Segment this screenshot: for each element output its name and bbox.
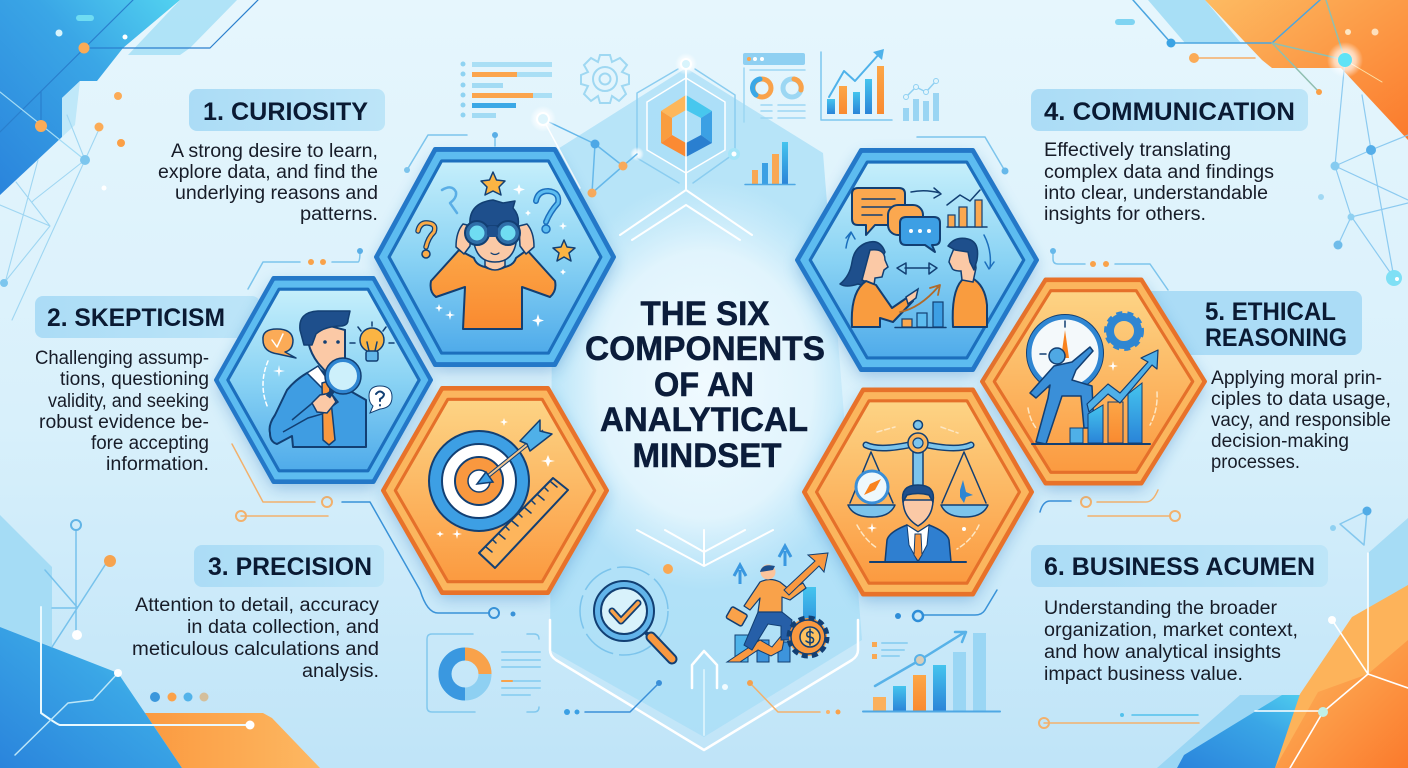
- description: skepticism: robust evidence be-: [39, 412, 209, 433]
- description: business acumen: Understanding the broader: [1044, 598, 1278, 619]
- title: [585, 295, 825, 475]
- heading: curiosity: 1. CURIOSITY: [203, 98, 368, 126]
- hexagon 2 skepticism: [216, 278, 431, 488]
- description: curiosity: underlying reasons and: [175, 183, 378, 204]
- description: business acumen: and how analytical insights: [1044, 642, 1281, 663]
- description: communication: complex data and findings: [1044, 162, 1274, 183]
- icon: magnifier with check: [580, 564, 673, 659]
- heading: curiosity: [189, 89, 385, 131]
- description: ethical reasoning: Applying moral prin-: [1211, 368, 1382, 389]
- bottom right bar chart: [863, 632, 1000, 712]
- hexagon 1 curiosity: [376, 149, 614, 371]
- title: MINDSET: [632, 437, 782, 475]
- description: ethical reasoning: ciples to data usage,: [1211, 389, 1391, 410]
- description: business acumen: organization, market context,: [1044, 620, 1298, 641]
- icon: two people discussing data: [840, 188, 994, 328]
- description: skepticism: information.: [106, 454, 209, 475]
- icon: central hexagon emblem: [630, 53, 740, 183]
- text: 5 ethical reasoning: [1205, 298, 1391, 473]
- corner: bottom right: [1157, 506, 1408, 768]
- description: skepticism: fore accepting: [91, 433, 209, 454]
- heading: precision: 3. PRECISION: [208, 553, 372, 581]
- decorative top bars list: [460, 62, 552, 118]
- title: THE SIX: [640, 295, 770, 333]
- bar chart with rising line: [821, 49, 892, 120]
- description: curiosity: [158, 141, 378, 225]
- description: communication: insights for others.: [1044, 204, 1206, 225]
- title: ANALYTICAL: [600, 401, 808, 439]
- description: curiosity: A strong desire to learn,: [171, 141, 378, 162]
- description: precision: analysis.: [302, 661, 379, 682]
- heading: ethical reasoning: REASONING: [1205, 324, 1347, 352]
- description: communication: Effectively translating: [1044, 140, 1231, 161]
- heading: ethical reasoning: [1205, 298, 1347, 352]
- text: 3 precision: [132, 545, 384, 682]
- heading: ethical reasoning: 5. ETHICAL: [1205, 298, 1336, 326]
- description: skepticism: [35, 348, 209, 475]
- description: precision: in data collection, and: [187, 617, 379, 638]
- icon: target with arrow and ruler: [429, 418, 568, 568]
- icon: person with binoculars: [418, 172, 575, 329]
- panel: 5 ethical heading pill: [1130, 291, 1362, 355]
- icon: gear outline: [581, 55, 629, 103]
- text: 6 business acumen: [1031, 545, 1328, 685]
- description: skepticism: tions, questioning: [60, 369, 209, 390]
- panel: 2 skepticism heading pill: [35, 296, 260, 338]
- heading: communication: [1031, 89, 1308, 131]
- hexagon 5 ethical reasoning: [982, 280, 1205, 490]
- description: precision: meticulous calculations and: [132, 639, 379, 660]
- corner: top right: [1115, 0, 1408, 286]
- description: skepticism: validity, and seeking: [48, 391, 209, 412]
- icon: person with magnifier and bulb: [263, 311, 394, 447]
- description: business acumen: [1044, 598, 1298, 685]
- text: 2 skepticism: [35, 304, 225, 475]
- donut report card: [427, 634, 540, 712]
- description: communication: into clear, understandable: [1044, 183, 1268, 204]
- text: 1 curiosity: [158, 89, 385, 225]
- small pale chart: [903, 78, 939, 121]
- heading: communication: 4. COMMUNICATION: [1044, 98, 1295, 126]
- description: precision: [132, 595, 380, 682]
- description: curiosity: explore data, and find the: [158, 162, 378, 183]
- heading: business acumen: 6. BUSINESS ACUMEN: [1044, 553, 1315, 581]
- heading: precision: [194, 545, 384, 587]
- small orange blue chart: [745, 142, 795, 184]
- title: COMPONENTS: [585, 330, 825, 368]
- description: skepticism: Challenging assump-: [35, 348, 209, 369]
- description: business acumen: impact business value.: [1044, 664, 1243, 685]
- heading: business acumen: [1031, 545, 1328, 587]
- corner: bottom left: [0, 515, 320, 768]
- icon: compass, climber, gear and growth bars: [1026, 313, 1158, 444]
- description: ethical reasoning: decision-making: [1211, 431, 1349, 452]
- icon: climbing growth person: [726, 546, 828, 662]
- dashboard window icon: [743, 53, 805, 122]
- text: 4 communication: [1031, 89, 1308, 225]
- description: ethical reasoning: processes.: [1211, 452, 1300, 473]
- description: ethical reasoning: [1211, 368, 1391, 473]
- network nodes near curiosity: [530, 106, 637, 198]
- description: curiosity: patterns.: [300, 204, 378, 225]
- title: OF AN: [654, 366, 754, 404]
- heading: skepticism: 2. SKEPTICISM: [47, 304, 225, 332]
- hexagon 3 precision: [383, 388, 607, 598]
- description: ethical reasoning: vacy, and responsible: [1211, 410, 1391, 431]
- corner: top left: [0, 0, 258, 320]
- central backdrop hexagon: [540, 60, 870, 750]
- hexagon 6 business acumen: [804, 390, 1032, 600]
- hexagon 4 communication: [797, 150, 1037, 376]
- icon: balance scale with businessperson: [848, 420, 988, 562]
- description: precision: Attention to detail, accuracy: [135, 595, 380, 616]
- connectors: [232, 132, 1199, 728]
- description: communication: [1044, 140, 1274, 225]
